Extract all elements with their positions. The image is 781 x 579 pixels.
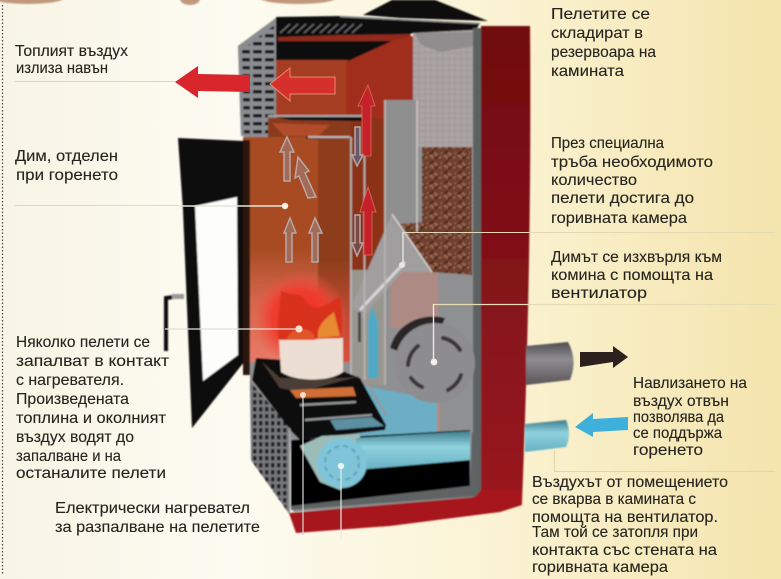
- text: pellets ignite: с нагревателя.: [16, 372, 124, 389]
- upper chamber: [268, 60, 348, 118]
- reddish ceiling strip: [278, 34, 413, 41]
- door: [178, 138, 244, 428]
- text: smoke expelled: вентилатор: [551, 285, 647, 302]
- shelf black: [252, 358, 386, 440]
- text: outside air: се поддържа: [633, 425, 722, 442]
- text: special pipe: тръба необходимото: [551, 154, 713, 171]
- burner plate: [262, 362, 360, 392]
- louver grille: [238, 18, 276, 136]
- text: special pipe: горивната камера: [551, 210, 687, 227]
- inlet fan: [317, 438, 367, 488]
- text: hot air goes out: [15, 43, 128, 77]
- top black panel: [270, 16, 480, 62]
- text: outside air: [633, 375, 747, 459]
- text: smoke expelled: комина с помощта на: [551, 267, 713, 284]
- text: pellets ignite: въздух водят до: [16, 429, 134, 446]
- lower right grey compartment: [385, 230, 473, 500]
- text: smoke from burning: [15, 148, 118, 184]
- text: pellets stored: Пелетите се: [551, 6, 650, 23]
- red plinth: [289, 490, 522, 533]
- text: smoke expelled: Димът се изхвърля към: [551, 249, 722, 266]
- hands at the top edge: [0, 0, 336, 5]
- door hinge: [243, 140, 250, 375]
- text: room air: се вкарва в камината с: [532, 491, 696, 508]
- text: hot air goes out: излиза навън: [16, 60, 108, 77]
- text: special pipe: [551, 135, 713, 227]
- flames: [278, 290, 342, 340]
- blue block: [356, 385, 437, 442]
- horizontal blue tube: [356, 431, 470, 470]
- air duct elbow: [300, 434, 360, 490]
- leader: hot air: [15, 80, 175, 82]
- text: outside air: въздух отвън: [633, 393, 729, 410]
- pellet stove cutaway: [166, 0, 574, 533]
- hopper grey panels: [413, 30, 474, 275]
- leader: room air: [554, 450, 775, 472]
- duct column: [350, 118, 385, 273]
- text: electric heater: Електрически нагревател: [55, 500, 250, 517]
- text: pellets ignite: останалите пелети: [16, 465, 166, 482]
- baffle: [270, 116, 362, 121]
- text: outside air: позволява да: [633, 409, 724, 426]
- bottom grey band: [291, 432, 480, 510]
- text: outside air: горенето: [633, 442, 703, 459]
- leader: pellets ignite: [165, 325, 303, 333]
- fan: [390, 317, 445, 352]
- text: room air: [532, 474, 728, 576]
- text: special pipe: пелети достига до: [551, 190, 694, 207]
- text: room air: Въздухът от помещението: [532, 474, 728, 491]
- text: pellets ignite: Няколко пелети се: [16, 334, 150, 351]
- text: pellets stored: резервоара на: [551, 44, 656, 61]
- leader: smoke: [15, 203, 288, 209]
- leader: smoke fan: [431, 304, 775, 365]
- text: room air: Там той се затопля при: [532, 524, 698, 541]
- text: outside air: Навлизането на: [633, 375, 747, 392]
- arrow: hot air inside: [270, 68, 335, 101]
- text: pellets stored: камината: [551, 63, 624, 80]
- outlet pipe: [526, 342, 574, 385]
- text: pellets stored: складират в: [551, 25, 643, 42]
- text: pellets ignite: запалват в контакт: [16, 353, 170, 370]
- text: electric heater: [55, 500, 260, 536]
- text: electric heater: за разпалване на пелетите: [55, 519, 260, 536]
- arrows: red riser: [358, 85, 376, 255]
- text: smoke expelled: [551, 249, 722, 302]
- burner pot: [279, 338, 343, 380]
- text: pellets stored: [551, 6, 656, 80]
- leader: pellet feed: [399, 232, 775, 268]
- blue air duct: [368, 306, 378, 378]
- text: pellets ignite: Произведената: [16, 391, 129, 408]
- inner steel divider: [473, 28, 481, 498]
- leader: electric heater: [300, 392, 306, 535]
- arrow: smoke out: [580, 346, 628, 368]
- pellet chute: [352, 214, 432, 318]
- outer red wall: [481, 26, 530, 508]
- text: room air: контакта със стената на: [532, 542, 717, 559]
- text: smoke from burning: Дим, отделен: [15, 148, 118, 165]
- chimney cap: [363, 0, 488, 21]
- shelf steps: [300, 380, 386, 420]
- grill side: [250, 381, 290, 515]
- dotted left border: [2, 5, 4, 575]
- pellets: [400, 147, 472, 275]
- text: special pipe: количество: [551, 172, 637, 189]
- stove backing: [243, 30, 473, 512]
- text: smoke from burning: при горенето: [16, 167, 118, 184]
- duct lines: [351, 100, 417, 385]
- text: room air: горивната камера: [532, 559, 668, 576]
- top hatch: [280, 24, 362, 33]
- door handle: [166, 296, 182, 351]
- text: special pipe: През специална: [551, 135, 664, 152]
- arrows: smoke in firebox: [280, 127, 363, 262]
- flame glow: [250, 270, 346, 356]
- text: pellets ignite: запалване и на: [16, 448, 121, 465]
- leader: room air fan: [338, 463, 344, 540]
- inlet pipe: [525, 420, 569, 452]
- text: pellets ignite: топлина и околният: [16, 410, 167, 427]
- text: hot air goes out: Топлият въздух: [15, 43, 128, 60]
- arrow: outside air in: [575, 413, 628, 437]
- firebox back: [268, 118, 350, 140]
- base black zone: [291, 430, 470, 508]
- arrow: hot air out: [175, 66, 250, 98]
- text: room air: помощта на вентилатор.: [532, 509, 718, 526]
- text: pellets ignite: [16, 334, 170, 482]
